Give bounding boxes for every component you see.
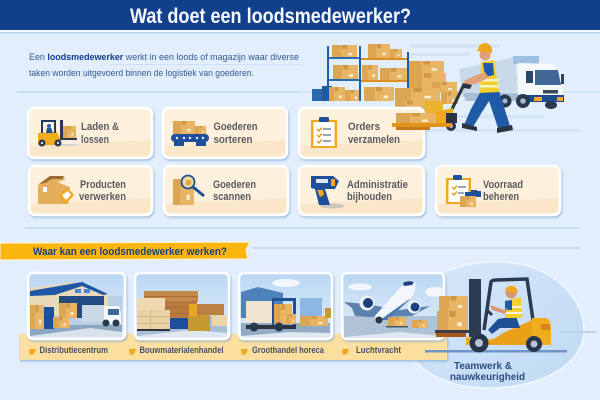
card: Goederen sorteren: sorteren (214, 134, 253, 146)
photo: Groothandel horeca (239, 273, 332, 339)
card: Voorraad beheren (436, 166, 560, 215)
card: Producten verwerken: verwerken (79, 191, 126, 203)
blob caption: nauwkeurigheid (450, 371, 525, 383)
blob background for forklift (410, 262, 584, 388)
photo: Bouwmaterialenhandel (135, 273, 229, 339)
icon: open box with tool (38, 176, 74, 204)
card: Voorraad beheren: beheren (483, 191, 519, 203)
hero illustration: warehouse worker with pallet jack and truck (300, 43, 600, 133)
caption: Bouwmaterialenhandel: Bouwmaterialenhandel (140, 345, 224, 356)
card: Producten verwerken: Producten (80, 179, 126, 191)
icon: barcode scanner (311, 176, 344, 208)
photo: Luchtvracht (342, 273, 445, 339)
card: Orders verzamelen (299, 108, 424, 158)
intro text: taken worden uitgevoerd binnen de logistiek van goederen. (29, 68, 254, 79)
section banner: Waar kan een loodsmedewerker werken? (33, 246, 227, 258)
caption: Luchtvracht (342, 345, 402, 356)
icon: box with magnifier (173, 176, 204, 205)
card: Administratie bijhouden: bijhouden (347, 191, 392, 203)
motion streaks (300, 44, 600, 132)
caption: Groothandel horeca: Groothandel horeca (252, 345, 325, 356)
card: Administratie bijhouden (299, 166, 424, 215)
pallet jack foreground overlap (392, 113, 452, 130)
truck (459, 56, 564, 109)
card: Orders verzamelen: verzamelen (348, 134, 400, 146)
card: Goederen scannen: scannen (213, 191, 251, 203)
icon: conveyor belt (171, 121, 209, 146)
card: Goederen scannen (164, 166, 288, 215)
forklift with driver (425, 279, 596, 352)
caption: Luchtvracht: Luchtvracht (356, 345, 402, 356)
label strip (19, 334, 447, 360)
card: Administratie bijhouden: Administratie (347, 179, 408, 191)
title banner: Wat doet een loodsmedewerker? (130, 4, 411, 28)
card: Producten verwerken (29, 166, 152, 215)
intro text: Een loodsmedewerker werkt in een loods of magazijn waar diverse (29, 52, 299, 63)
caption: Distributiecentrum: Distributiecentrum (40, 345, 108, 356)
worker (462, 43, 513, 133)
icon: clipboard checklist (311, 117, 337, 148)
card: Orders verzamelen: Orders (348, 121, 380, 133)
card: Goederen sorteren: Goederen (214, 121, 258, 133)
photo: Distributiecentrum (28, 273, 125, 339)
card: Laden & lossen: Laden & (81, 121, 119, 133)
card: Voorraad beheren: Voorraad (483, 179, 523, 191)
card: Goederen scannen: Goederen (213, 179, 256, 191)
icon: forklift (38, 120, 78, 146)
icon: clipboard with boxes (446, 175, 481, 207)
card: Laden & lossen: lossen (81, 134, 109, 146)
stacked boxes behind pallet (409, 61, 458, 104)
intro text (29, 52, 299, 79)
pallet jack with boxes (392, 83, 472, 131)
title banner (0, 0, 600, 34)
blob caption (450, 360, 525, 383)
card: Goederen sorteren (163, 108, 287, 158)
blob caption: Teamwerk & (454, 360, 512, 372)
card: Laden & lossen (28, 108, 152, 158)
section banner (0, 242, 250, 260)
shelving with boxes (312, 44, 409, 101)
